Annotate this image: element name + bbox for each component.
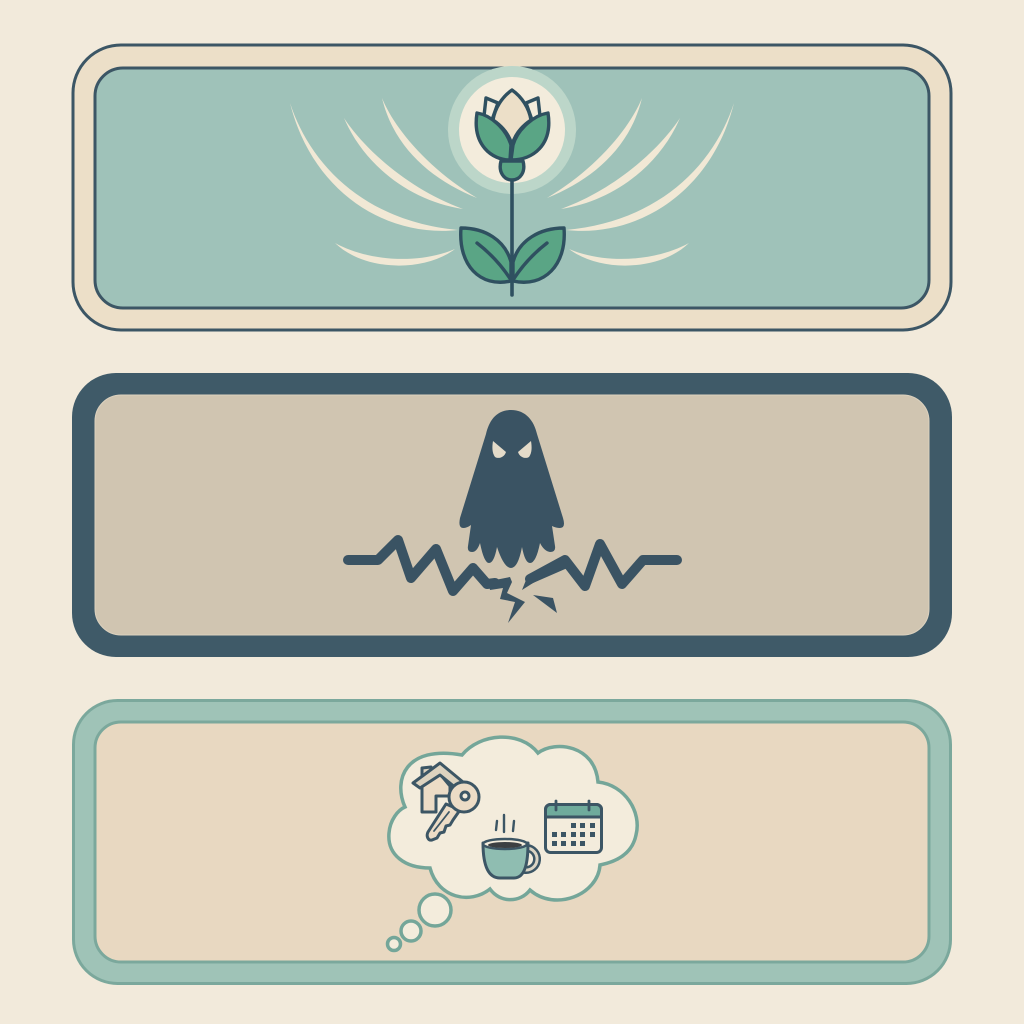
panel frame: daydream bbox=[74, 700, 950, 984]
glow behind bud bbox=[448, 66, 576, 194]
icon: key bbox=[427, 782, 479, 840]
panel: ghost bbox=[72, 373, 952, 657]
icon: flower bbox=[461, 90, 564, 295]
icon: house bbox=[413, 763, 463, 812]
icon: broken line bbox=[348, 540, 677, 623]
panel frame: flower bbox=[73, 45, 951, 330]
panel frame: ghost bbox=[72, 373, 952, 657]
thought cloud bbox=[388, 737, 637, 950]
light rays bbox=[290, 98, 734, 266]
panel: flower bbox=[73, 45, 951, 330]
icon: ghost bbox=[459, 410, 564, 568]
panel: daydream bbox=[74, 700, 950, 984]
icon: coffee cup bbox=[483, 815, 537, 878]
icon: calendar bbox=[546, 801, 602, 852]
